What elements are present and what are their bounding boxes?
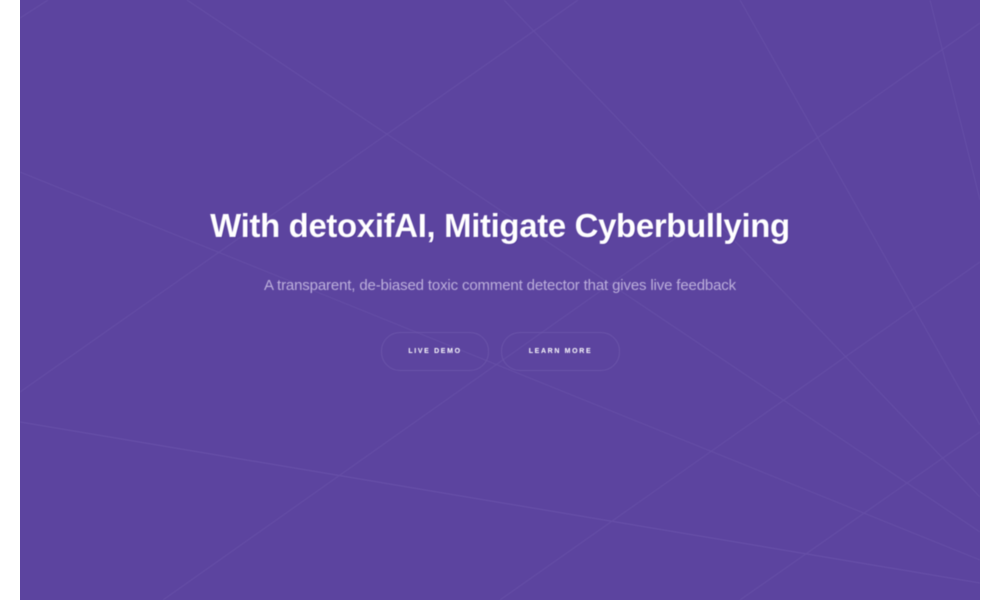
title: With detoxifAI, Mitigate Cyberbullying <box>210 207 790 244</box>
button: learn more <box>501 332 620 371</box>
button: live demo <box>381 332 489 371</box>
button: live demo: LIVE DEMO <box>408 348 462 355</box>
button: learn more: LEARN MORE <box>529 348 592 355</box>
subtitle: A transparent, de-biased toxic comment detector that gives live feedback <box>264 276 736 294</box>
